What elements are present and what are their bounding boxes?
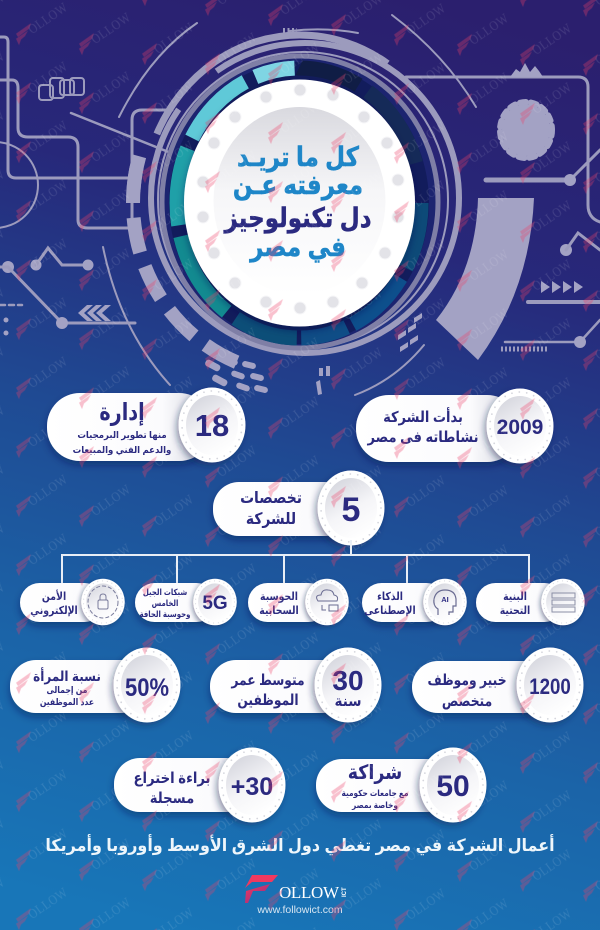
- stat: 50 partnerships: وخاصة بمصر: [351, 801, 398, 810]
- stat: 50% women: من إجمالى: [47, 684, 87, 696]
- title: دل تكنولوجيز: [223, 203, 372, 235]
- stat: 1200 experts: خبير وموظف: [427, 672, 507, 689]
- specialisation: 5G: [135, 579, 237, 625]
- left ring blocks: [133, 31, 467, 375]
- keyboard block artwork: [204, 313, 422, 395]
- stat: 50% women: [10, 648, 180, 722]
- stat: 50% women: 50%: [125, 674, 169, 701]
- stat: average age 30: 30: [332, 665, 364, 696]
- stat: 2009 company start: نشاطاته فى مصر: [367, 428, 479, 446]
- stat: 5 specialisations: [213, 470, 384, 546]
- stat: 30+ patents: [114, 748, 286, 822]
- specialisation: infrastructure: البنية: [503, 591, 527, 603]
- central dial: [133, 31, 467, 375]
- logo: OLLOW: [279, 883, 340, 902]
- logo: [245, 875, 348, 916]
- specialisation: cloud: [248, 579, 349, 625]
- white title plate: [184, 80, 415, 326]
- specialisation: cybersecurity: الإلكتروني: [30, 605, 78, 617]
- specialisation: 5G: وحوسبة الحافة: [140, 609, 191, 619]
- title: في مصر: [248, 232, 346, 264]
- stat: 1200 experts: 1200: [529, 676, 571, 699]
- stat: average age 30: متوسط عمر: [230, 672, 305, 689]
- icon: cloud and monitor: [317, 590, 338, 611]
- stat: average age 30: الموظفين: [237, 692, 299, 709]
- specialisation: AI: [362, 579, 467, 625]
- stat: 50 partnerships: [316, 748, 486, 822]
- specialisation: cloud: الحوسبة: [260, 591, 298, 603]
- stat: 5 specialisations: تخصصات: [240, 489, 302, 507]
- top grey arc: [143, 35, 457, 371]
- icon: server: [552, 593, 575, 612]
- icon: lock: [88, 586, 118, 618]
- stat: 18 departments: إدارة: [99, 398, 145, 427]
- stat: 50% women: عدد الموظفين: [40, 696, 94, 708]
- dark band: [169, 62, 429, 344]
- connector tree: [62, 540, 529, 583]
- stat: 30+ patents: +30: [231, 773, 273, 801]
- specialisation: infrastructure: التحتية: [500, 605, 530, 617]
- stat: 5 specialisations: للشركة: [246, 510, 296, 528]
- title: معرفته عـن: [233, 170, 363, 202]
- specialisation: cloud: السحابية: [259, 605, 299, 617]
- specialisation: AI: الإصطناعى: [364, 605, 416, 617]
- stat: 2009 company start: 2009: [497, 416, 543, 439]
- circuit artwork: right: [283, 15, 600, 395]
- stat: 18 departments: [47, 388, 246, 462]
- title: كل ما تريـد: [237, 142, 359, 174]
- specialisation: infrastructure: [476, 579, 585, 625]
- stat: 18 departments: 18: [195, 408, 229, 443]
- specialisation: 5G: الخامس: [152, 598, 179, 608]
- specialisation: cybersecurity: الأمن: [42, 589, 66, 603]
- circuit artwork: left: [0, 23, 197, 385]
- title: [223, 142, 372, 264]
- specialisation: AI: الذكاء: [377, 591, 403, 603]
- specialisation: cybersecurity: [20, 579, 125, 625]
- stat: 30+ patents: مسجلة: [150, 789, 194, 806]
- specialisation: 5G: 5G: [202, 593, 228, 614]
- stat: 50 partnerships: 50: [436, 770, 470, 803]
- stat: 2009 company start: بدأت الشركة: [383, 407, 463, 426]
- stat: 5 specialisations: 5: [342, 491, 360, 529]
- coloured segments ring: [177, 68, 421, 338]
- footer statement: أعمال الشركة في مصر تغطي دول الشرق الأوسط وأوروبا وأمريكا: [45, 835, 555, 856]
- stat: 1200 experts: متخصص: [442, 693, 492, 709]
- specialisation: 5G: شبكات الجيل: [143, 587, 187, 597]
- stat: average age 30: [210, 648, 382, 722]
- logo: ICT: [342, 887, 348, 897]
- stat: 50 partnerships: شراكة: [348, 761, 402, 784]
- icon: AI head: AI: [441, 595, 449, 604]
- stat: 50 partnerships: مع جامعات حكومية: [341, 789, 409, 798]
- stat: 1200 experts: [412, 648, 584, 722]
- stat: 30+ patents: براءة اختراع: [134, 769, 210, 787]
- stat: 2009 company start: [356, 388, 554, 464]
- stat: average age 30: سنة: [335, 693, 361, 710]
- stat: 18 departments: والدعم الفني والمبيعات: [73, 445, 171, 456]
- stat: 50% women: نسبة المرأة: [33, 667, 101, 684]
- logo: www.followict.com: [256, 904, 343, 916]
- outer grey ring: [151, 43, 459, 353]
- stat: 18 departments: منها تطوير البرمجيات: [77, 430, 167, 441]
